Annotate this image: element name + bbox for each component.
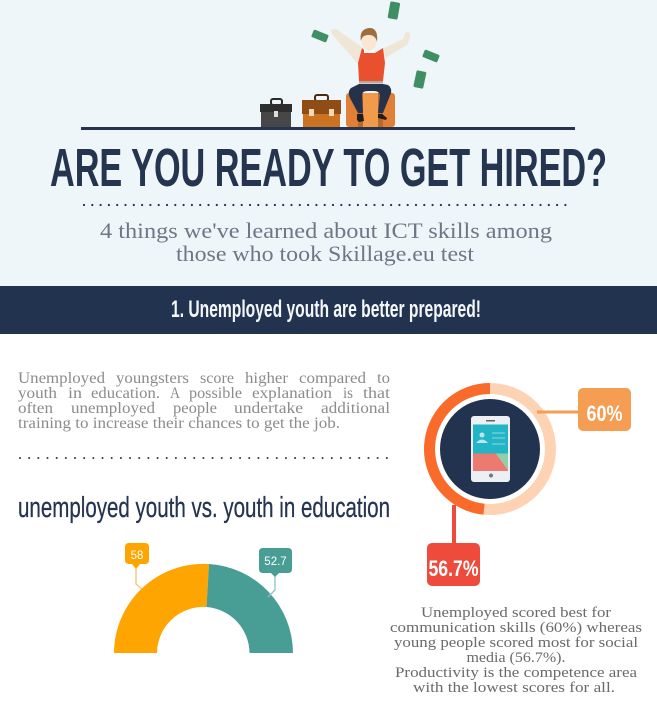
subtitle: 4 things we've learned about ICT skills among [100,218,552,243]
subtitle: those who took Skillage.eu test [176,241,474,266]
segment: unemployed youth [114,564,209,653]
icon: smartphone [471,416,510,482]
icon: torso vest [358,48,385,84]
text block: findings: communication skills (60%) whereas [390,620,642,636]
text block: explanation: score [200,370,234,387]
text block: explanation: higher [245,370,289,387]
text block: explanation: people [173,400,217,417]
text block: findings: with the lowest scores for all. [413,680,615,696]
text block: explanation: undertake [234,400,303,417]
callout: 56.7%: 56.7% [428,556,478,581]
dark disc [440,399,540,499]
text block: findings: young people scored most for social [394,635,638,651]
icon: raised arms [331,29,410,63]
text block: explanation: often [18,400,53,417]
segment: youth in education [206,564,293,653]
text block: explanation: possible [189,385,242,402]
text block: explanation: training to increase their chances to get the job. [18,415,340,432]
text block: explanation: in [68,385,82,402]
text block: explanation: additional [321,400,390,417]
chart heading: unemployed youth vs. youth in education [18,492,390,524]
text block: explanation: unemployed [71,400,155,417]
panel: header background [0,0,657,286]
callout: 52.7: 52.7 [264,556,287,568]
section heading: 1. Unemployed youth are better prepared! [171,296,481,323]
callout: 60%: 60% [586,401,622,426]
text block: findings [390,605,642,696]
callout: 58 [125,543,149,589]
text block: explanation: is [343,385,353,402]
text block: explanation [18,370,391,432]
callout: 58: 58 [131,550,143,562]
text block: explanation: A [170,385,181,402]
callout: 52.7 [259,548,292,597]
icon: brown briefcase [302,95,341,127]
text block: findings: Unemployed scored best for [421,605,611,621]
icon: black briefcase [260,99,292,127]
text block: explanation: Unemployed [18,370,105,387]
icon: head [361,28,377,53]
icon: flying banknotes [311,1,440,89]
chart: half doughnut [114,543,293,653]
text block: explanation: that [363,385,391,402]
panel: section band [0,286,657,334]
text block: explanation: explanation [252,385,332,402]
subtitle [100,218,552,266]
callout: 56.7% [427,505,480,586]
text block: findings: Productivity is the competence area [395,665,637,681]
icon: legs and shoes [349,84,391,122]
text block: explanation: education. [91,385,160,402]
text block: explanation: to [377,370,390,387]
baseline rule [81,127,575,130]
text block: explanation: compared [299,370,366,387]
illustration: man with money and briefcases [260,1,440,127]
ring track [430,388,550,510]
callout: 60% [537,388,631,431]
icon: orange suitcase [346,93,395,127]
chart: ring with phone [427,388,631,586]
text block: explanation: youngsters [116,370,189,387]
ring value [430,388,490,509]
text block: explanation: youth [18,385,57,402]
text block: findings: media (56.7%). [466,650,566,666]
